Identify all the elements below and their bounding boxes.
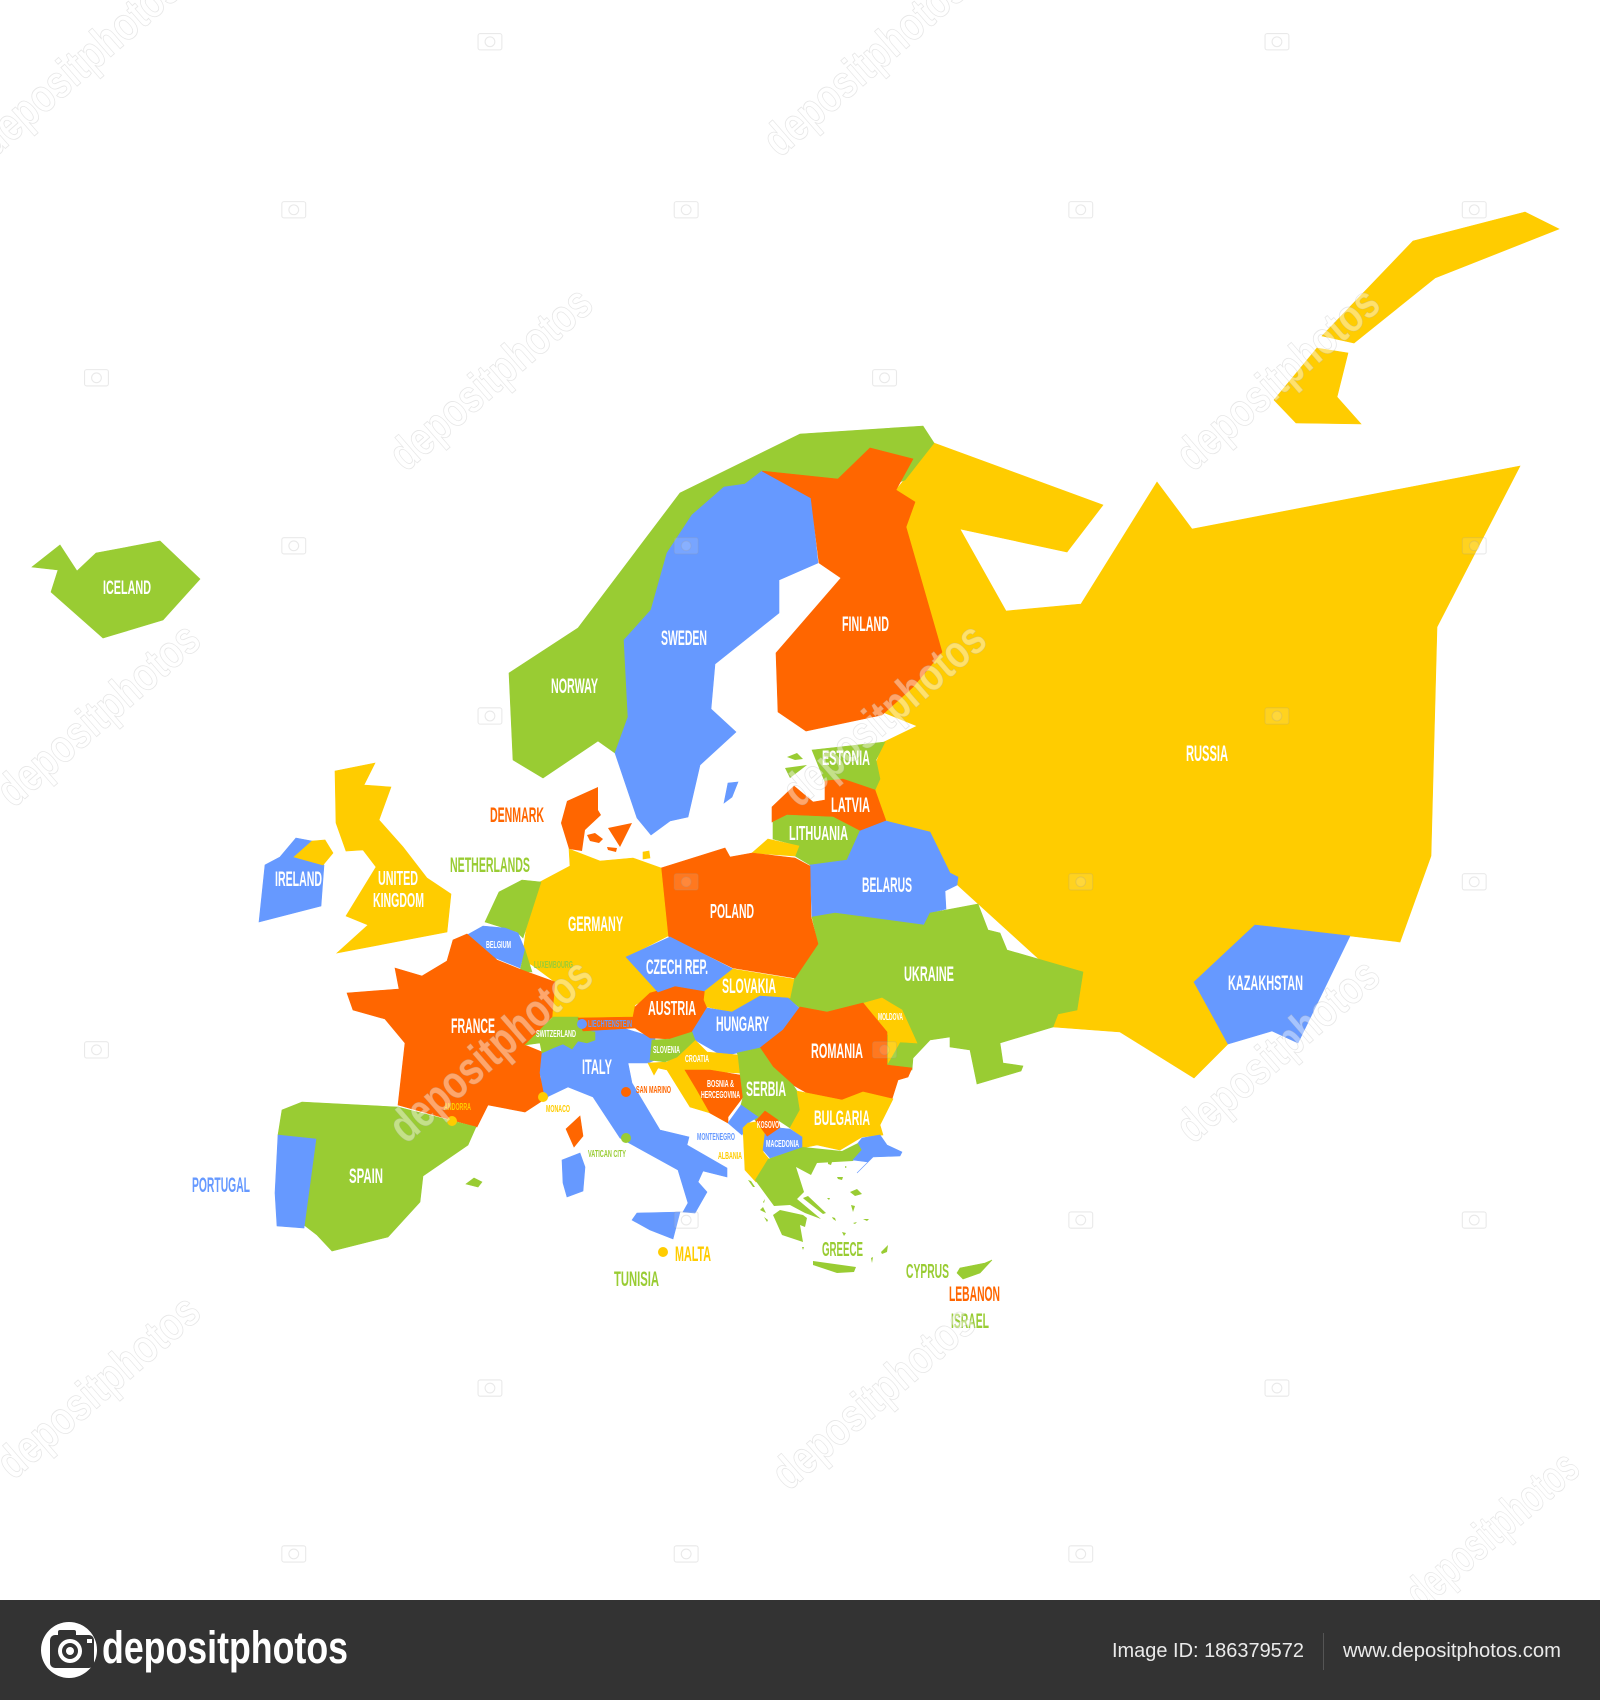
country: Macedonia — [763, 1128, 802, 1158]
country: Denmark — [561, 787, 632, 852]
country: Iceland — [32, 541, 200, 638]
country: Luxembourg — [520, 950, 532, 972]
country: Finland — [762, 448, 942, 731]
country: Montenegro — [728, 1105, 758, 1135]
country: Ireland — [259, 838, 324, 922]
country: Belgium — [467, 926, 525, 968]
country: Poland — [661, 848, 818, 978]
island: Balearic — [466, 1178, 482, 1187]
country: Estonia — [812, 742, 885, 790]
label: Ukraine: UKRAINE — [904, 963, 954, 986]
label: Hungary: HUNGARY — [716, 1013, 769, 1036]
country: Croatia — [648, 1040, 740, 1123]
island: Rugen — [643, 851, 650, 859]
marker: Vatican City — [621, 1133, 631, 1143]
watermark overlay: depositphotos — [1165, 276, 1389, 480]
label: Germany: GERMANY — [568, 913, 623, 936]
label: Slovenia: SLOVENIA — [653, 1044, 680, 1056]
island: Corsica — [566, 1116, 583, 1147]
label: France: FRANCE — [451, 1015, 495, 1038]
label: Malta: MALTA — [675, 1243, 711, 1266]
country: Slovenia — [650, 1032, 695, 1062]
watermark overlay: depositphotos — [378, 276, 602, 480]
country: Germany — [522, 849, 668, 1019]
country: Belarus — [810, 821, 958, 925]
footer bar — [0, 1600, 1600, 1700]
country labels: PORTUGAL — [192, 1174, 250, 1197]
country labels: GREECE — [822, 1239, 863, 1261]
country: Latvia — [772, 779, 886, 831]
label: Bosnia and Hercegovina: BOSNIA & — [707, 1078, 734, 1090]
country: Italy — [540, 1028, 727, 1213]
country: Spain — [278, 1102, 476, 1251]
label: Kazakhstan: KAZAKHSTAN — [1228, 972, 1303, 995]
country: Netherlands — [485, 880, 541, 938]
country: Romania — [760, 1003, 912, 1100]
label: Austria: AUSTRIA — [648, 998, 696, 1020]
watermark overlay: depositphotos — [1165, 948, 1389, 1152]
label: Iceland: ICELAND — [103, 577, 151, 599]
country labels: ISRAEL — [951, 1310, 989, 1333]
label: Andorra: ANDORRA — [444, 1101, 471, 1113]
country: Greece — [748, 1143, 888, 1273]
label: Italy: ITALY — [582, 1056, 612, 1079]
island: Sardinia — [562, 1153, 585, 1197]
watermark overlay: depositphotos — [761, 1295, 985, 1499]
label: United Kingdom: KINGDOM — [373, 890, 424, 912]
label: Estonia: ESTONIA — [822, 747, 870, 770]
label: Cyprus: CYPRUS — [906, 1261, 949, 1283]
country: Sweden — [615, 471, 818, 835]
country labels: SWEDEN — [661, 627, 707, 650]
country: Lithuania — [773, 815, 860, 865]
country labels: CZECH REP. — [646, 956, 708, 979]
label: Bulgaria: BULGARIA — [814, 1107, 870, 1130]
marker: Andorra — [447, 1116, 457, 1126]
label: Netherlands: NETHERLANDS — [450, 854, 530, 877]
country: Ukraine — [788, 904, 1083, 1084]
country: Serbia — [737, 1048, 800, 1128]
country: Bulgaria — [790, 1091, 893, 1150]
island: Sicily — [632, 1212, 680, 1239]
country: Moldova — [864, 998, 917, 1063]
marker: Malta — [658, 1247, 668, 1257]
label: Bosnia and Hercegovina: HERCEGOVINA — [701, 1089, 740, 1101]
country: Switzerland — [525, 1017, 595, 1053]
label: Romania: ROMANIA — [811, 1040, 863, 1063]
country labels: LEBANON — [949, 1283, 1000, 1306]
country: Kosovo — [756, 1111, 780, 1137]
website url: www.depositphotos.com — [1342, 1640, 1561, 1662]
map: country shapes — [32, 212, 1559, 1279]
label: San Marino: SAN MARINO — [636, 1084, 671, 1096]
label: Monaco: MONACO — [546, 1103, 570, 1115]
label: Poland: POLAND — [710, 901, 754, 923]
watermark overlay: depositphotos — [378, 948, 602, 1152]
country labels: KOSOVO — [757, 1119, 779, 1131]
label: Vatican City: VATICAN CITY — [588, 1148, 626, 1160]
label: Spain: SPAIN — [349, 1165, 383, 1188]
country: Austria — [578, 986, 707, 1039]
label: Denmark: DENMARK — [490, 804, 544, 827]
country: Portugal — [275, 1135, 316, 1228]
country: Hungary — [692, 996, 799, 1056]
label: Serbia: SERBIA — [746, 1078, 786, 1101]
label: Macedonia: MACEDONIA — [766, 1138, 799, 1150]
island: Gotland — [724, 782, 738, 803]
label: Luxembourg: LUXEMBOURG — [534, 960, 573, 971]
label: Slovakia: SLOVAKIA — [722, 975, 776, 998]
label: Switzerland: SWITZERLAND — [536, 1028, 576, 1040]
marker: San Marino — [621, 1087, 631, 1097]
label: United Kingdom: UNITED — [378, 868, 418, 890]
icon: depositphotos camera logo — [41, 1622, 97, 1678]
label: Finland: FINLAND — [842, 613, 889, 636]
country labels: NORWAY — [551, 674, 598, 698]
country: Kaliningrad — [752, 839, 799, 856]
watermark overlay: depositphotos — [772, 612, 996, 816]
country: Cyprus — [957, 1260, 992, 1279]
country: Russia — [870, 443, 1520, 1078]
label: Latvia: LATVIA — [831, 794, 870, 817]
country: France — [347, 934, 555, 1127]
label: Belgium: BELGIUM — [486, 940, 511, 951]
label: Russia: RUSSIA — [1186, 741, 1228, 766]
islands: Estonia — [785, 753, 807, 778]
marker: Monaco — [538, 1092, 548, 1102]
label: Croatia: CROATIA — [685, 1053, 709, 1065]
label: Ireland: IRELAND — [275, 868, 322, 891]
country: Russia, Chukotka south — [1274, 348, 1361, 424]
country: Bosnia and Herzegovina — [685, 1070, 743, 1123]
country: Kazakhstan — [1194, 925, 1350, 1044]
country: Albania — [743, 1122, 769, 1182]
label: Tunisia: TUNISIA — [614, 1268, 659, 1291]
country labels: MONTENEGRO — [697, 1131, 735, 1143]
country: United Kingdom — [335, 763, 451, 953]
country: Norway — [509, 426, 934, 778]
country: Turkey in Europe — [853, 1135, 902, 1173]
country: Russia, Chukotka north — [1322, 212, 1559, 343]
country labels: MOLDOVA — [878, 1012, 903, 1023]
country labels — [103, 577, 1303, 1333]
region: Northern Ireland — [294, 840, 333, 865]
logo wordmark: depositphotos — [102, 1622, 348, 1673]
label: Albania: ALBANIA — [718, 1150, 742, 1162]
marker: Liechtenstein — [577, 1019, 587, 1029]
country labels: BELARUS — [862, 874, 912, 897]
image id: Image ID: 186379572 — [1112, 1640, 1304, 1662]
label: Liechtenstein: LIECHTENSTEIN — [588, 1018, 632, 1030]
country: Czech Republic — [626, 937, 733, 992]
country: Slovakia — [704, 969, 794, 1012]
label: Lithuania: LITHUANIA — [789, 823, 848, 845]
